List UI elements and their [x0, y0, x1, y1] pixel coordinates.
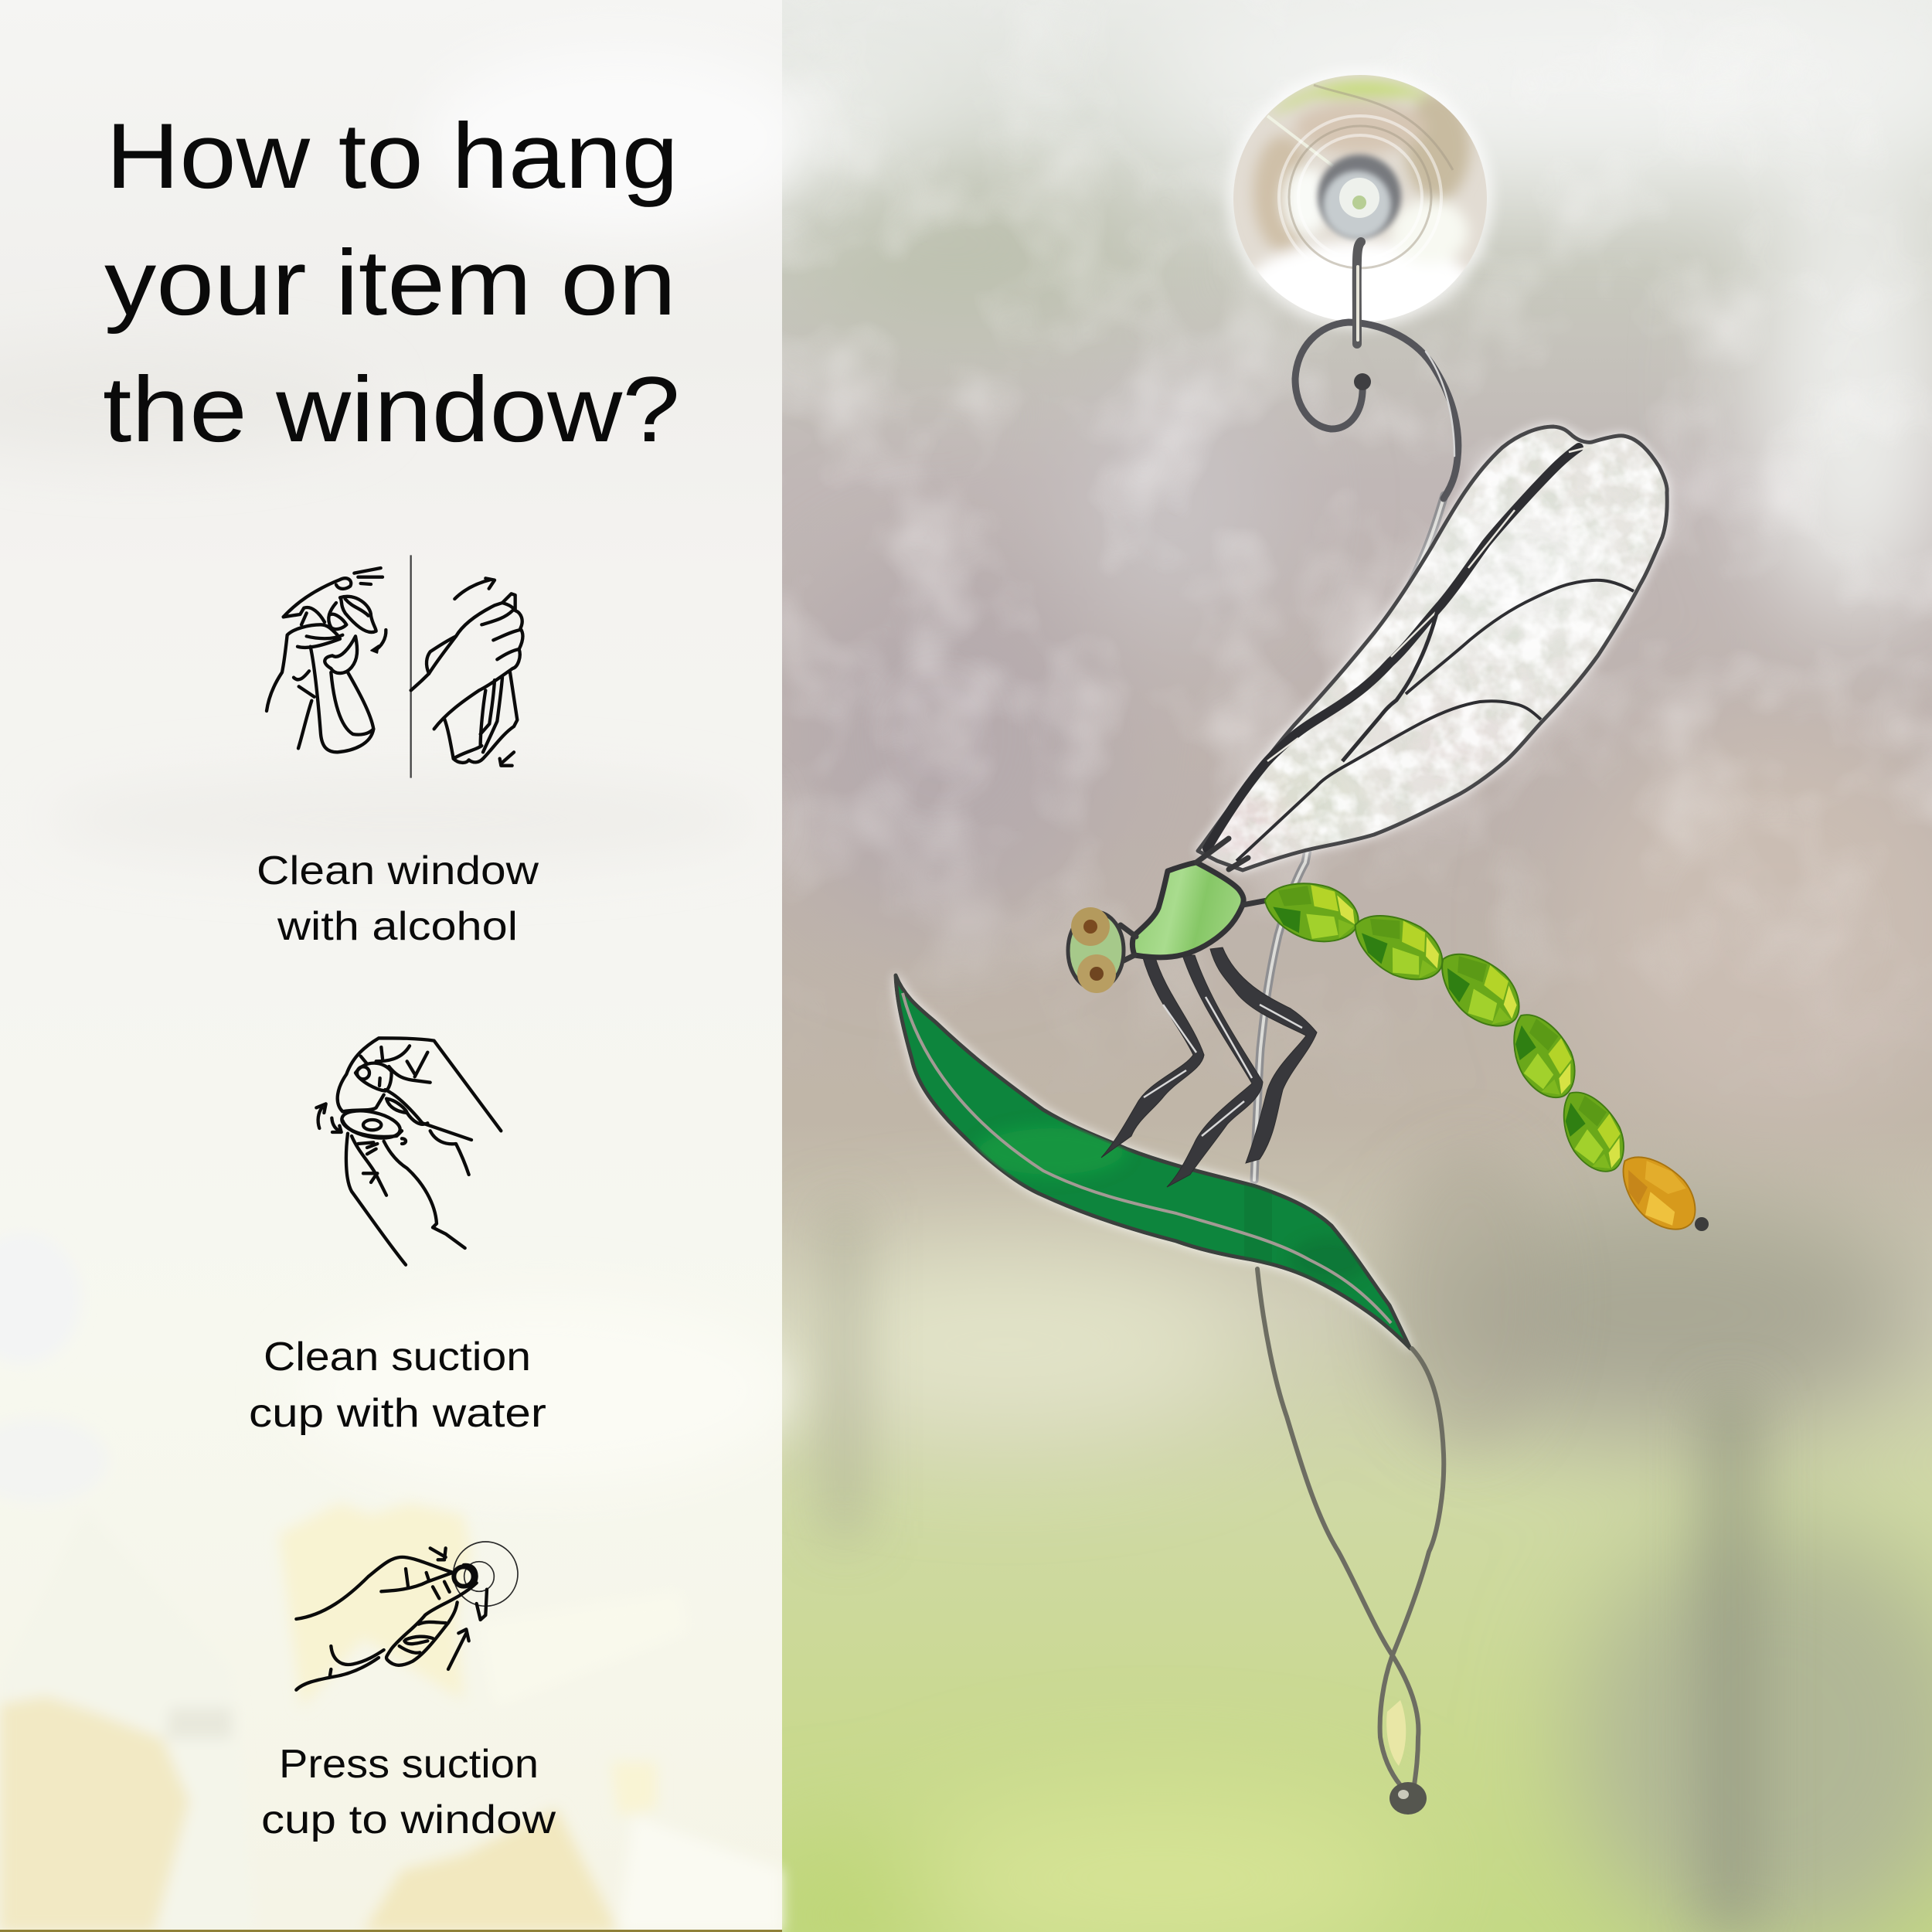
suction cup — [1227, 69, 1493, 338]
step 2 label — [249, 1335, 546, 1436]
step 3 label: Press suction — [279, 1742, 539, 1787]
title: How to hang — [106, 104, 679, 208]
wire curl hook — [1295, 242, 1458, 498]
dragonfly wings — [1193, 420, 1675, 876]
left instruction panel background — [0, 0, 811, 1932]
leaf — [896, 975, 1410, 1349]
title: your item on — [104, 231, 676, 335]
step 2 label: cup with water — [249, 1391, 546, 1436]
icon: pressing suction cup — [296, 1542, 518, 1690]
step 1 label — [257, 849, 539, 949]
photo background: blurred window view — [750, 0, 1932, 1932]
stem wire behind the wing — [1254, 495, 1444, 1180]
dragonfly legs — [1101, 947, 1317, 1187]
step 3 label: cup to window — [261, 1798, 556, 1842]
amber bead tip — [1606, 1142, 1709, 1243]
crystal bead tail — [1259, 875, 1709, 1243]
step 3 label — [261, 1742, 556, 1842]
title: the window? — [103, 358, 680, 461]
lower twisted wires and end ball — [1257, 1269, 1444, 1815]
dragonfly thorax — [1113, 838, 1267, 966]
step 1 label: with alcohol — [277, 904, 518, 949]
title — [103, 104, 680, 461]
step 1 label: Clean window — [257, 849, 539, 893]
icon: hands cleaning suction cup — [316, 1038, 501, 1265]
icon: spray bottle and cloth wiping — [267, 555, 522, 778]
dragonfly head and eyes — [1068, 907, 1124, 993]
step 2 label: Clean suction — [264, 1335, 531, 1379]
